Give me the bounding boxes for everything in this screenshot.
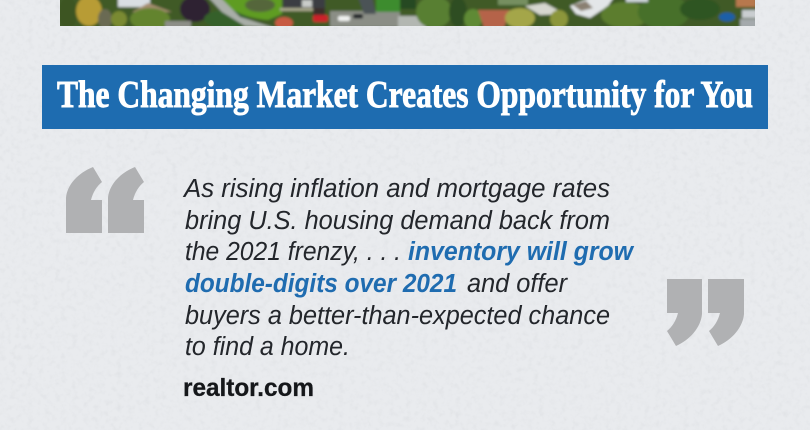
photo: aerial view of a neighbourhood: [60, 0, 755, 26]
icon: opening quotation mark: [66, 167, 144, 233]
title banner: [42, 65, 768, 129]
quote text: and offer: [467, 270, 568, 298]
quote text: bring U.S. housing demand back from: [185, 207, 610, 235]
icon: closing quotation mark: [667, 279, 744, 346]
quote text: buyers a better-than-expected chance: [185, 302, 610, 330]
quote text: As rising inflation and mortgage rates: [182, 175, 610, 203]
source: realtor.com: realtor.com: [183, 374, 314, 402]
quote text: inventory will grow: [408, 238, 635, 266]
quote text: double-digits over 2021: [185, 270, 457, 298]
quote text: to find a home.: [185, 333, 350, 361]
quote text: the 2021 frenzy, . . .: [185, 238, 401, 266]
quote text: [182, 175, 635, 361]
